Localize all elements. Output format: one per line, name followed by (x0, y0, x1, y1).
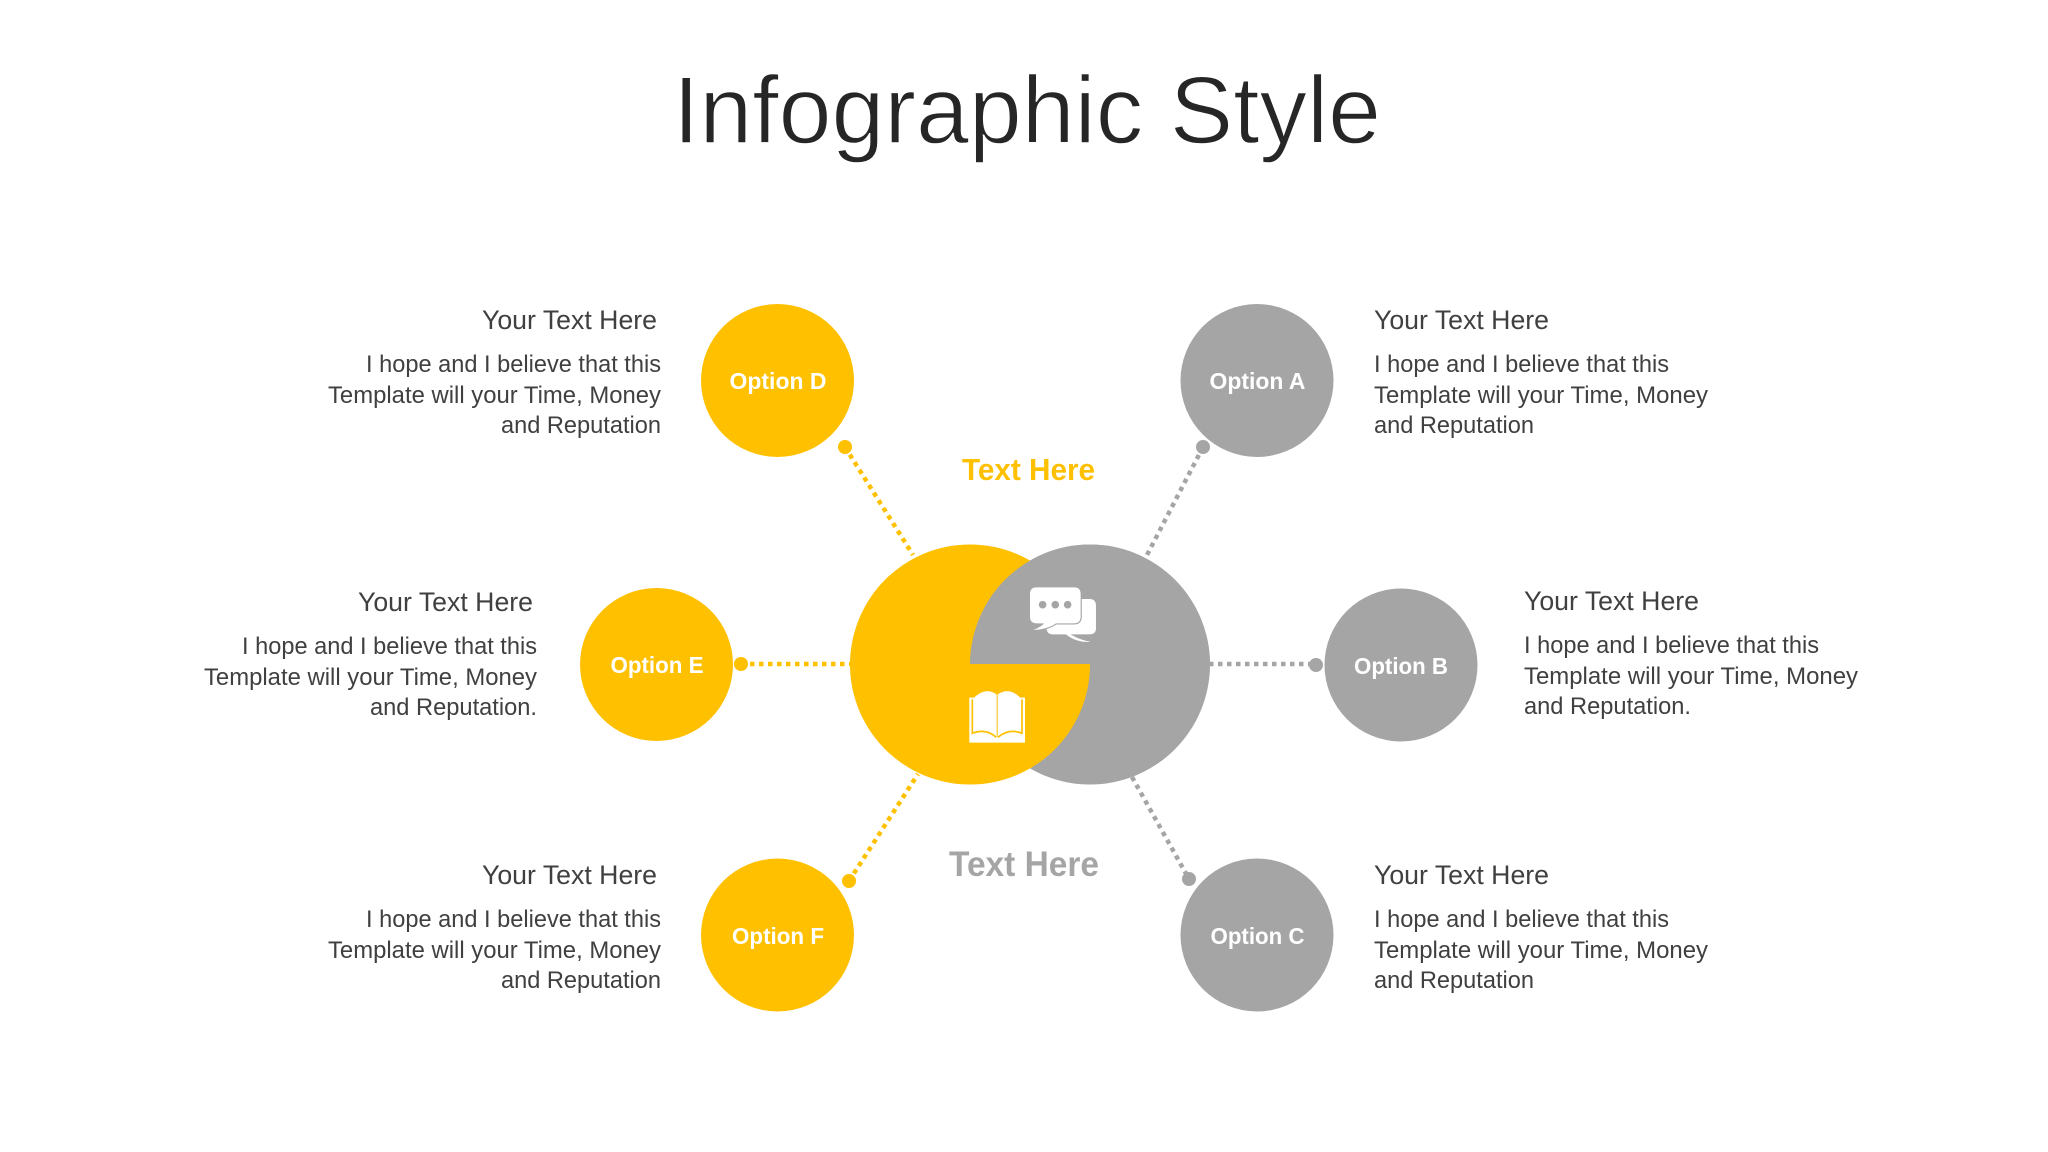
text block: option D: Template will your Time, Money (328, 382, 662, 409)
text block: option D: and Reputation (501, 412, 661, 439)
text block: option D: Your Text Here (482, 305, 657, 335)
text block: option B: and Reputation. (1524, 693, 1691, 720)
connector: option B (1209, 658, 1323, 672)
text block: option B (1524, 586, 1859, 720)
text block: option D: I hope and I believe that this (366, 351, 661, 378)
text block: option F (328, 860, 662, 994)
option E circle: Option E (610, 652, 704, 678)
option D circle: Option D (730, 368, 826, 394)
text block: option F: Template will your Time, Money (328, 937, 662, 964)
text block: option B: Template will your Time, Money (1524, 663, 1859, 690)
text block: option E (204, 587, 538, 721)
text block: option C: I hope and I believe that this (1374, 906, 1669, 933)
title: Infographic Style (673, 57, 1381, 164)
text block: option E: Your Text Here (358, 587, 533, 617)
connector: option C (1132, 777, 1196, 886)
label: gray text here: Text Here (949, 845, 1099, 884)
text block: option A: and Reputation (1374, 412, 1534, 439)
label: yellow text here: Text Here (962, 452, 1095, 487)
connector: option D (838, 440, 913, 555)
text block: option A: Your Text Here (1374, 305, 1549, 335)
text block: option A: Template will your Time, Money (1374, 382, 1709, 409)
text block: option A (1374, 305, 1709, 439)
text block: option C: Your Text Here (1374, 860, 1549, 890)
text block: option E: Template will your Time, Money (204, 664, 538, 691)
option E circle (580, 588, 733, 741)
icon: speech bubbles (1030, 587, 1096, 642)
option C circle (1180, 858, 1334, 1012)
option A circle (1180, 304, 1334, 457)
option C circle: Option C (1210, 923, 1304, 949)
connector: option E (734, 657, 851, 671)
text block: option C (1374, 860, 1709, 994)
text block: option F: Your Text Here (482, 860, 657, 890)
option F circle (701, 858, 854, 1012)
connector: option F (842, 774, 918, 888)
option B circle: Option B (1354, 653, 1448, 679)
option F circle: Option F (732, 923, 824, 949)
text block: option E: I hope and I believe that this (242, 633, 537, 660)
text block: option F: and Reputation (501, 967, 661, 994)
text block: option B: Your Text Here (1524, 586, 1699, 616)
icon: open book (969, 691, 1025, 743)
text block: option A: I hope and I believe that this (1374, 351, 1669, 378)
option D circle (701, 304, 854, 457)
text block: option F: I hope and I believe that this (366, 906, 661, 933)
text block: option C: and Reputation (1374, 967, 1534, 994)
option B circle (1324, 588, 1478, 742)
option A circle: Option A (1210, 368, 1306, 394)
text block: option E: and Reputation. (370, 694, 537, 721)
connector: option A (1147, 440, 1210, 555)
text block: option D (328, 305, 662, 439)
text block: option C: Template will your Time, Money (1374, 937, 1709, 964)
text block: option B: I hope and I believe that this (1524, 632, 1819, 659)
central overlapping circles (850, 544, 1210, 784)
